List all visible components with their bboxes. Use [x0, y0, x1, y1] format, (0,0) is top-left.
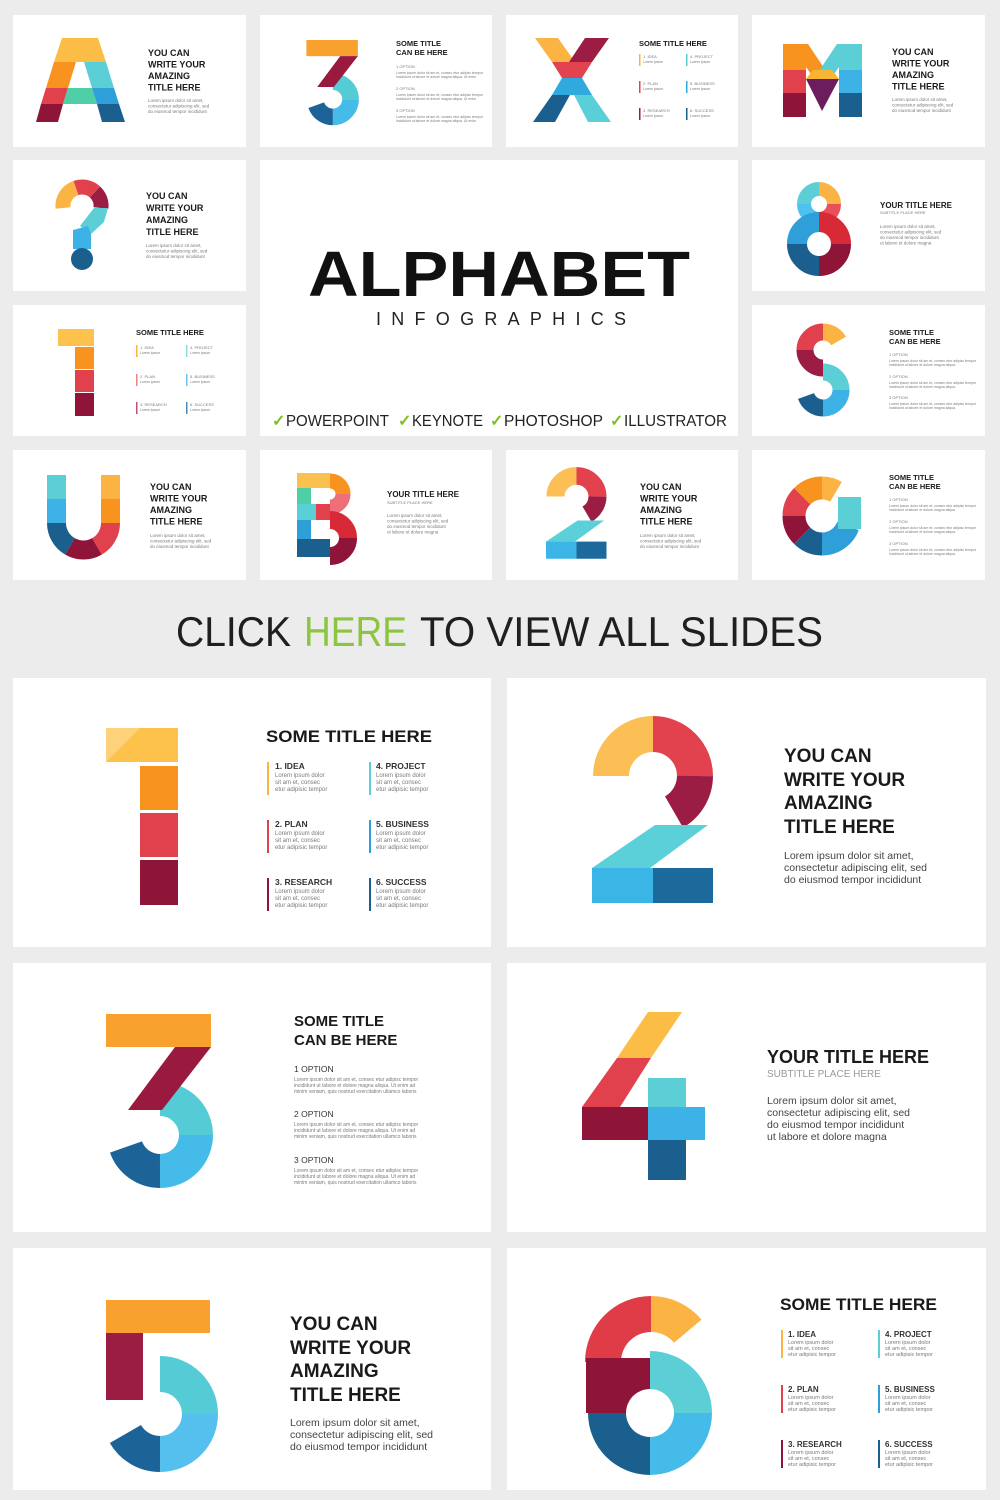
text: big 3 options: Lorem ipsum dolor sit am et, consec etur adipisc tempor — [294, 1122, 419, 1128]
text: X card: Lorem ipsum — [643, 114, 663, 118]
text: G card: Lorem ipsum dolor sit am et, consec etur adipisc tempor — [889, 548, 977, 552]
text: 8 card: ut labore et dolore magna — [880, 240, 932, 246]
panel: big number 2 — [507, 678, 986, 947]
text: 3 small card: Lorem ipsum dolor sit am et, consec etur adipisc tempor — [396, 115, 484, 119]
text: big 1 list: etur adipisic tempor — [376, 787, 428, 793]
text: big 2 title: AMAZING — [784, 793, 873, 814]
icon: letter A — [36, 38, 125, 122]
text: big 5 title: consectetur adipiscing elit, sed — [290, 1429, 433, 1441]
text: 3 small card: incididunt ut labore et dolore magna aliqua. Ut enim — [396, 75, 476, 79]
checklist: software: PHOTOSHOP — [504, 413, 603, 430]
text: S card — [889, 328, 977, 410]
text: big 6 list: sit am et, consec — [885, 1401, 927, 1407]
text: X card — [639, 39, 715, 120]
text: big 3 options: incididunt ut labore et dolore magna aliqua. Ut enim ad — [294, 1174, 415, 1180]
text: big 2 title: Lorem ipsum dolor sit amet, — [784, 850, 914, 862]
text: big 1 list: sit am et, consec — [275, 838, 320, 844]
text: big 6 list: etur adipisic tempor — [885, 1462, 933, 1468]
panel: big number 4 — [507, 963, 986, 1232]
text: S card: incididunt ut labore et dolore magna aliqua. — [889, 363, 956, 367]
icon: number 2 small — [546, 476, 606, 559]
title: ALPHABET: ALPHABET — [308, 238, 690, 310]
text: U card: do eiusmod tempor incididunt — [150, 544, 210, 549]
text: big 1 list: etur adipisic tempor — [275, 845, 327, 851]
text: A card title: Lorem ipsum dolor sit amet, — [148, 98, 204, 103]
text: big 1 list: sit am et, consec — [275, 896, 320, 902]
text: big 6 list: sit am et, consec — [788, 1401, 830, 1407]
text: 2 small card: YOU CAN — [640, 482, 682, 492]
text: big 3 options: minim veniam, quis nostrud exercitation ullamco laboris — [294, 1089, 417, 1095]
icon: question mark — [63, 187, 108, 270]
text: M card: do eiusmod tempor incididunt — [892, 108, 952, 113]
text: X card: 1. IDEA — [643, 54, 657, 59]
text: X card: Lorem ipsum — [643, 87, 663, 91]
text: 2 small card: AMAZING — [640, 505, 682, 515]
text: 2 small card: consectetur adipiscing elit, sed — [640, 538, 702, 544]
text: big 1 list: Lorem ipsum dolor — [376, 889, 426, 895]
text: big 3 options: Lorem ipsum dolor sit am et, consec etur adipisc tempor — [294, 1168, 419, 1174]
text: big 6 list: Lorem ipsum dolor — [788, 1340, 834, 1346]
text: A card title: consectetur adipiscing elit, sed — [148, 104, 210, 108]
text: big 2 title — [784, 746, 927, 886]
text: big 6 list: 5. BUSINESS — [885, 1385, 935, 1394]
text: X card: 4. PROJECT — [690, 54, 714, 59]
text: big 6 list: Lorem ipsum dolor — [885, 1395, 931, 1401]
text: big 3 options: CAN BE HERE — [294, 1032, 397, 1049]
text: X card: Lorem ipsum — [643, 60, 663, 64]
text: big 3 options: 2 OPTION — [294, 1109, 334, 1119]
text: 8 card: SUBTITLE PLACE HERE — [880, 210, 926, 215]
text: big 6 list: sit am et, consec — [788, 1456, 830, 1462]
text: G card: incididunt ut labore et dolore magna aliqua. — [889, 552, 956, 556]
icon: number 3 small — [306, 40, 358, 117]
text: X card: 5. BUSINESS — [690, 81, 715, 86]
text: big 5 title: WRITE YOUR — [290, 1338, 411, 1359]
text: big 5 title: YOU CAN — [290, 1314, 378, 1335]
text: big 5 title: AMAZING — [290, 1361, 379, 1382]
text: big 6 list: Lorem ipsum dolor — [788, 1395, 834, 1401]
text: 8 card: do eiusmod tempor incididunt — [880, 235, 940, 240]
text: M card: TITLE HERE — [892, 82, 945, 92]
text: big 2 title: consectetur adipiscing elit, sed — [784, 862, 927, 874]
text: S card: Lorem ipsum dolor sit am et, consec etur adipisc tempor — [889, 402, 977, 406]
text: B card: Lorem ipsum dolor sit amet, — [387, 513, 443, 518]
text: big 3 options: incididunt ut labore et dolore magna aliqua. Ut enim ad — [294, 1128, 415, 1134]
heading: click here — [176, 608, 823, 655]
text: G card: CAN BE HERE — [889, 482, 941, 491]
text: 2 small card — [640, 482, 702, 549]
text: U card: AMAZING — [150, 505, 192, 515]
text: big 6 list: etur adipisic tempor — [788, 1462, 836, 1468]
text: big 6 list: 4. PROJECT — [885, 1330, 932, 1339]
text: big 3 options: SOME TITLE — [294, 1013, 384, 1030]
text: S card: CAN BE HERE — [889, 337, 941, 346]
text: big 1 list: Lorem ipsum dolor — [275, 889, 325, 895]
text: big 3 options: minim veniam, quis nostrud exercitation ullamco laboris — [294, 1134, 417, 1140]
text: 3 small card — [396, 39, 484, 123]
text: S card: Lorem ipsum dolor sit am et, consec etur adipisc tempor — [889, 359, 977, 363]
text: 1 small card: SOME TITLE HERE — [136, 328, 204, 337]
text: question card: do eiusmod tempor incididunt — [146, 254, 206, 259]
text: big 2 title: TITLE HERE — [784, 817, 895, 838]
text: G card: 1 OPTION — [889, 497, 908, 502]
text: G card: SOME TITLE — [889, 473, 934, 482]
text: 1 small card: Lorem ipsum — [190, 351, 210, 355]
text: big 1 list: sit am et, consec — [376, 838, 421, 844]
card: letter X — [506, 15, 738, 147]
icon: letter S — [805, 332, 841, 408]
text: 3 small card: Lorem ipsum dolor sit am et, consec etur adipisc tempor — [396, 71, 484, 75]
text: big 3 options — [294, 1013, 419, 1186]
text: big 5 title: do eiusmod tempor incididunt — [290, 1441, 427, 1453]
checklist: software: ✓ — [272, 413, 285, 430]
text: big 4 title: Lorem ipsum dolor sit amet, — [767, 1095, 897, 1107]
text: question card: consectetur adipiscing elit, sed — [146, 248, 208, 254]
text: 3 small card: SOME TITLE — [396, 39, 441, 48]
text: G card: Lorem ipsum dolor sit am et, consec etur adipisc tempor — [889, 504, 977, 508]
text: big 1 list: Lorem ipsum dolor — [275, 773, 325, 779]
text: B card: consectetur adipiscing elit, sed — [387, 518, 449, 524]
card: letter M — [752, 15, 985, 147]
panel: center title — [260, 160, 738, 436]
text: 1 small card: Lorem ipsum — [190, 408, 210, 412]
text: question card: WRITE YOUR — [146, 203, 204, 213]
panel: big number 5 — [13, 1248, 491, 1490]
text: B card: do eiusmod tempor incididunt — [387, 524, 447, 529]
card: number 3 small — [260, 15, 492, 147]
text: big 4 title: consectetur adipiscing elit, sed — [767, 1107, 910, 1119]
text: 8 card — [880, 201, 953, 246]
text: 1 small card: Lorem ipsum — [190, 380, 210, 384]
text: 3 small card: Lorem ipsum dolor sit am et, consec etur adipisc tempor — [396, 93, 484, 97]
text: big 3 options: 3 OPTION — [294, 1155, 334, 1165]
text: U card: TITLE HERE — [150, 516, 203, 526]
text: big 6 list: etur adipisic tempor — [788, 1352, 836, 1358]
text: X card: 3. RESEARCH — [643, 108, 670, 113]
text: S card: 3 OPTION — [889, 395, 908, 400]
card: number 8 — [752, 160, 985, 291]
text: S card: 1 OPTION — [889, 352, 908, 357]
text: big 4 title: ut labore et dolore magna — [767, 1131, 887, 1143]
text: big 3 options: incididunt ut labore et dolore magna aliqua. Ut enim ad — [294, 1083, 415, 1089]
text: big 3 options: 1 OPTION — [294, 1064, 334, 1074]
text: big 1 list: etur adipisic tempor — [376, 845, 428, 851]
card: letter S — [752, 305, 985, 436]
text: G card: 2 OPTION — [889, 519, 908, 524]
text: A card title: do eiusmod tempor incididunt — [148, 109, 208, 114]
text: big 1 list: 2. PLAN — [275, 819, 308, 829]
text: 1 small card: 6. SUCCESS — [190, 402, 214, 407]
icon: letter B — [297, 473, 348, 557]
text: big 1 list: etur adipisic tempor — [376, 903, 428, 909]
icon: letter X — [533, 38, 611, 122]
text: big 1 list: SOME TITLE HERE — [266, 727, 432, 746]
heading: click here: CLICK — [176, 608, 291, 655]
panel: big number 6 — [507, 1248, 986, 1490]
text: big 6 list: sit am et, consec — [788, 1346, 830, 1352]
text: A card title: TITLE HERE — [148, 82, 201, 92]
card: letter A — [13, 15, 246, 147]
text: S card: SOME TITLE — [889, 328, 934, 337]
text: big 4 title: do eiusmod tempor incididunt — [767, 1119, 904, 1131]
text: big 1 list: 5. BUSINESS — [376, 819, 429, 829]
text: U card: WRITE YOUR — [150, 494, 208, 504]
text: 1 small card: 5. BUSINESS — [190, 374, 215, 379]
icon: number 1 — [106, 728, 178, 905]
card: number 1 small — [13, 305, 246, 436]
icon: number 5 — [106, 1300, 210, 1454]
text: B card: SUBTITLE PLACE HERE — [387, 500, 433, 505]
text: big 1 list: 4. PROJECT — [376, 761, 426, 771]
text: G card — [889, 473, 977, 556]
text: question card: TITLE HERE — [146, 227, 199, 237]
text: big 6 list: SOME TITLE HERE — [780, 1295, 937, 1314]
text: G card: 3 OPTION — [889, 541, 908, 546]
text: B card: YOUR TITLE HERE — [387, 490, 460, 499]
text: M card: AMAZING — [892, 70, 934, 80]
text: X card: Lorem ipsum — [690, 60, 710, 64]
text: M card: WRITE YOUR — [892, 58, 950, 68]
icon: letter M — [783, 44, 862, 117]
text: A card title: YOU CAN — [148, 48, 190, 58]
panel: big number 1 — [13, 678, 491, 947]
text: 3 small card: incididunt ut labore et dolore magna aliqua. Ut enim — [396, 119, 476, 123]
text: big 1 list: 1. IDEA — [275, 761, 305, 771]
text: M card — [892, 47, 954, 113]
text: 8 card: Lorem ipsum dolor sit amet, — [880, 224, 936, 229]
text: G card: incididunt ut labore et dolore magna aliqua. — [889, 530, 956, 534]
text: big 2 title: do eiusmod tempor incididunt — [784, 874, 921, 886]
text: big 1 list: Lorem ipsum dolor — [376, 831, 426, 837]
text: big 4 title: SUBTITLE PLACE HERE — [767, 1069, 881, 1080]
text: big 6 list: sit am et, consec — [885, 1346, 927, 1352]
text: 1 small card: 4. PROJECT — [190, 345, 214, 350]
panel: big number 3 — [13, 963, 491, 1232]
text: question card — [146, 191, 208, 259]
text: big 6 list: Lorem ipsum dolor — [885, 1340, 931, 1346]
card: letter B — [260, 450, 492, 580]
text: big 1 list: etur adipisic tempor — [275, 787, 327, 793]
text: S card: incididunt ut labore et dolore magna aliqua. — [889, 385, 956, 389]
text: big 6 list: Lorem ipsum dolor — [885, 1450, 931, 1456]
text: question card: Lorem ipsum dolor sit amet, — [146, 243, 202, 248]
text: G card: incididunt ut labore et dolore magna aliqua. — [889, 508, 956, 512]
text: 2 small card: Lorem ipsum dolor sit amet, — [640, 533, 696, 538]
text: big 3 options: minim veniam, quis nostrud exercitation ullamco laboris — [294, 1180, 417, 1186]
icon: number 4 — [582, 1012, 705, 1180]
text: big 1 list: Lorem ipsum dolor — [275, 831, 325, 837]
text: A card title: AMAZING — [148, 71, 190, 81]
text: big 6 list: Lorem ipsum dolor — [788, 1450, 834, 1456]
text: big 2 title: WRITE YOUR — [784, 770, 905, 791]
text: big 1 list: 3. RESEARCH — [275, 877, 332, 887]
text: X card: SOME TITLE HERE — [639, 39, 707, 48]
text: big 1 list: 6. SUCCESS — [376, 877, 427, 887]
text: 3 small card: 3 OPTION — [396, 108, 415, 113]
checklist: software: KEYNOTE — [412, 413, 483, 430]
text: 1 small card: Lorem ipsum — [140, 351, 160, 355]
text: 1 small card: 1. IDEA — [140, 345, 154, 350]
checklist: software: ✓ — [490, 413, 503, 430]
text: S card: incididunt ut labore et dolore magna aliqua. — [889, 406, 956, 410]
icon: number 1 small — [58, 329, 94, 416]
icon: number 6 — [585, 1296, 712, 1475]
text: U card: consectetur adipiscing elit, sed — [150, 538, 212, 544]
text: question card: YOU CAN — [146, 191, 188, 201]
text: 8 card: consectetur adipiscing elit, sed — [880, 230, 942, 234]
text: 1 small card: 3. RESEARCH — [140, 402, 167, 407]
text: U card: Lorem ipsum dolor sit amet, — [150, 533, 206, 538]
text: 3 small card: incididunt ut labore et dolore magna aliqua. Ut enim — [396, 97, 476, 101]
text: G card: Lorem ipsum dolor sit am et, consec etur adipisc tempor — [889, 526, 977, 530]
text: 2 small card: TITLE HERE — [640, 516, 693, 526]
icon: number 3 — [106, 1014, 211, 1171]
checklist: software: ✓ — [398, 413, 411, 430]
text: big 1 list: etur adipisic tempor — [275, 903, 327, 909]
text: U card: YOU CAN — [150, 482, 192, 492]
text: B card — [387, 490, 460, 534]
checklist: software — [272, 413, 727, 430]
text: big 4 title — [767, 1047, 929, 1143]
text: big 1 list: sit am et, consec — [275, 780, 320, 786]
text: big 6 list — [780, 1295, 937, 1468]
text: big 2 title: YOU CAN — [784, 746, 872, 767]
text: X card: Lorem ipsum — [690, 114, 710, 118]
text: big 5 title: Lorem ipsum dolor sit amet, — [290, 1417, 420, 1429]
text: M card: YOU CAN — [892, 47, 934, 57]
card: letter G — [752, 450, 985, 580]
text: big 6 list: sit am et, consec — [885, 1456, 927, 1462]
subtitle: INFOGRAPHICS: INFOGRAPHICS — [376, 309, 626, 329]
text: 3 small card: CAN BE HERE — [396, 48, 448, 57]
text: big 5 title: TITLE HERE — [290, 1385, 401, 1406]
text: big 6 list: 6. SUCCESS — [885, 1440, 933, 1449]
text: 8 card: YOUR TITLE HERE — [880, 201, 953, 210]
text: big 6 list: etur adipisic tempor — [788, 1407, 836, 1413]
text: 1 small card — [136, 328, 215, 414]
text: M card: consectetur adipiscing elit, sed — [892, 102, 954, 108]
text: S card: Lorem ipsum dolor sit am et, consec etur adipisc tempor — [889, 381, 977, 385]
text: big 4 title: YOUR TITLE HERE — [767, 1047, 929, 1067]
text: big 1 list — [266, 727, 432, 911]
text: B card: ut labore et dolore magna — [387, 530, 439, 534]
card: number 2 small — [506, 450, 738, 580]
card: letter U — [13, 450, 246, 580]
text: question card: AMAZING — [146, 215, 188, 225]
text: big 1 list: sit am et, consec — [376, 896, 421, 902]
card: question mark — [13, 160, 246, 291]
text: U card — [150, 482, 212, 549]
icon: letter U — [47, 475, 120, 550]
checklist: software: POWERPOINT — [286, 413, 389, 430]
text: 3 small card: 2 OPTION — [396, 86, 415, 91]
text: big 1 list: Lorem ipsum dolor — [376, 773, 426, 779]
text: big 6 list: 2. PLAN — [788, 1385, 819, 1394]
text: big 3 options: Lorem ipsum dolor sit am et, consec etur adipisc tempor — [294, 1077, 419, 1083]
text: 2 small card: do eiusmod tempor incididunt — [640, 544, 700, 549]
text: A card title — [148, 48, 210, 114]
text: 1 small card: 2. PLAN — [140, 374, 155, 379]
text: X card: Lorem ipsum — [690, 87, 710, 91]
text: big 1 list: sit am et, consec — [376, 780, 421, 786]
text: big 6 list: 1. IDEA — [788, 1330, 816, 1339]
text: X card: 6. SUCCESS — [690, 108, 714, 113]
text: A card title: WRITE YOUR — [148, 60, 206, 70]
text: 1 small card: Lorem ipsum — [140, 380, 160, 384]
text: X card: 2. PLAN — [643, 81, 658, 86]
heading: click here: TO VIEW ALL SLIDES — [420, 608, 823, 655]
text: 1 small card: Lorem ipsum — [140, 408, 160, 412]
text: 2 small card: WRITE YOUR — [640, 494, 698, 504]
checklist: software: ILLUSTRATOR — [624, 413, 727, 430]
text: big 6 list: etur adipisic tempor — [885, 1352, 933, 1358]
icon: number 8 — [797, 189, 841, 266]
icon: number 2 — [592, 734, 713, 903]
checklist: software: ✓ — [610, 413, 623, 430]
text: big 6 list: etur adipisic tempor — [885, 1407, 933, 1413]
text: big 6 list: 3. RESEARCH — [788, 1440, 842, 1449]
text: 3 small card: 1 OPTION — [396, 64, 415, 69]
heading: click here: HERE — [304, 608, 407, 655]
text: big 5 title — [290, 1314, 433, 1453]
text: M card: Lorem ipsum dolor sit amet, — [892, 97, 948, 102]
icon: letter G — [794, 488, 861, 544]
text: S card: 2 OPTION — [889, 374, 908, 379]
